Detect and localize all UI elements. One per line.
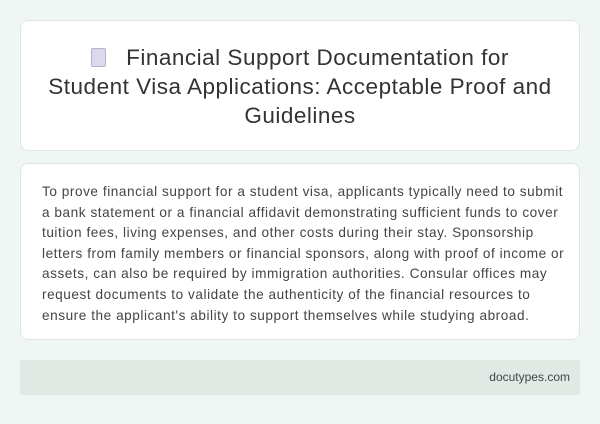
title card (20, 20, 580, 151)
description text: request documents to validate the authenticity of the financial resources to (42, 287, 530, 302)
description text (42, 184, 564, 323)
body text card (20, 163, 580, 340)
description text: ensure the applicant's ability to support themselves while studying abroad. (42, 308, 529, 323)
footer (20, 360, 580, 395)
description text: tuition fees, living expenses, and other costs during their stay. Sponsorship (42, 225, 534, 240)
title (48, 45, 552, 128)
footer source text: docutypes.com (489, 370, 570, 384)
description text: a bank statement or a financial affidavit demonstrating sufficient funds to cover (42, 205, 558, 220)
title: Guidelines (244, 103, 356, 128)
description text: letters from family members or financial sponsors, along with proof of income or (42, 246, 564, 261)
description text: assets, can also be required by immigration authorities. Consular offices may (42, 266, 547, 281)
description text: To prove financial support for a student visa, applicants typically need to submit (42, 184, 563, 199)
title: Financial Support Documentation for (126, 45, 509, 70)
icon: receipt (91, 48, 106, 67)
title: Student Visa Applications: Acceptable Proof and (48, 74, 552, 99)
